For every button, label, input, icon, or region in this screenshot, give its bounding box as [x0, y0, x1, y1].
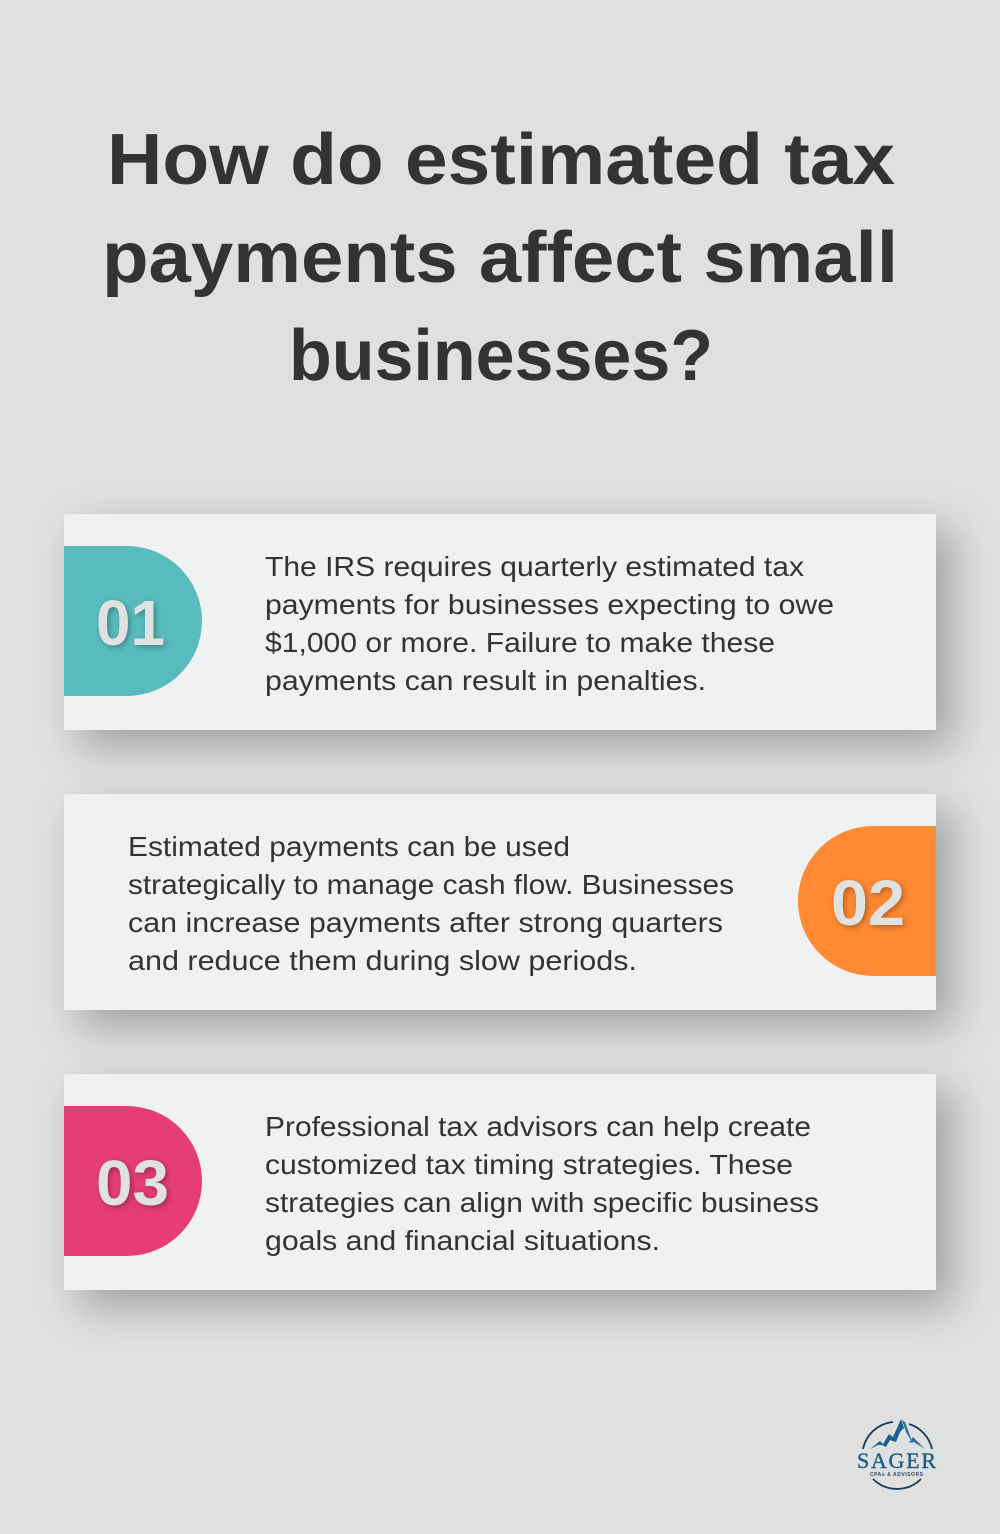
- text block: step 03: strategies can align with specific business: [265, 1187, 819, 1218]
- number: 03: 03: [96, 1147, 169, 1219]
- title: payments affect small: [102, 218, 898, 298]
- badge: 02: [798, 826, 936, 976]
- text block: step 01: $1,000 or more. Failure to make these: [265, 627, 775, 658]
- text block: step 02: can increase payments after strong quarters: [128, 907, 723, 938]
- text block: step 03: goals and financial situations.: [265, 1225, 660, 1256]
- badge: 03: [64, 1106, 202, 1256]
- text block: step 03: Professional tax advisors can help create: [265, 1111, 811, 1142]
- number: 01: 01: [96, 587, 165, 659]
- text block: step 01: [265, 551, 834, 696]
- text block: step 02: [128, 831, 734, 976]
- text block: step 02: and reduce them during slow periods.: [128, 945, 637, 976]
- text block: step 01: The IRS requires quarterly estimated tax: [265, 551, 804, 582]
- logo: Sager CPAs & Advisors: SAGER: [857, 1448, 936, 1473]
- number: 02: 02: [831, 867, 905, 939]
- text block: step 01: payments for businesses expecting to owe: [265, 589, 834, 620]
- text block: step 02: strategically to manage cash flow. Businesses: [128, 869, 734, 900]
- title: [102, 120, 898, 396]
- badge: 01: [64, 546, 202, 696]
- logo: Sager CPAs & Advisors: CPAs & ADVISORS: [870, 1472, 924, 1478]
- title: How do estimated tax: [107, 120, 895, 200]
- text block: step 03: customized tax timing strategies. These: [265, 1149, 793, 1180]
- title: businesses?: [289, 316, 713, 396]
- panel: step 03: [64, 1074, 936, 1290]
- text block: step 01: payments can result in penalties.: [265, 665, 706, 696]
- panel: step 02: [64, 794, 936, 1010]
- panel: step 01: [64, 514, 936, 730]
- text block: step 03: [265, 1111, 819, 1256]
- text block: step 02: Estimated payments can be used: [128, 831, 570, 862]
